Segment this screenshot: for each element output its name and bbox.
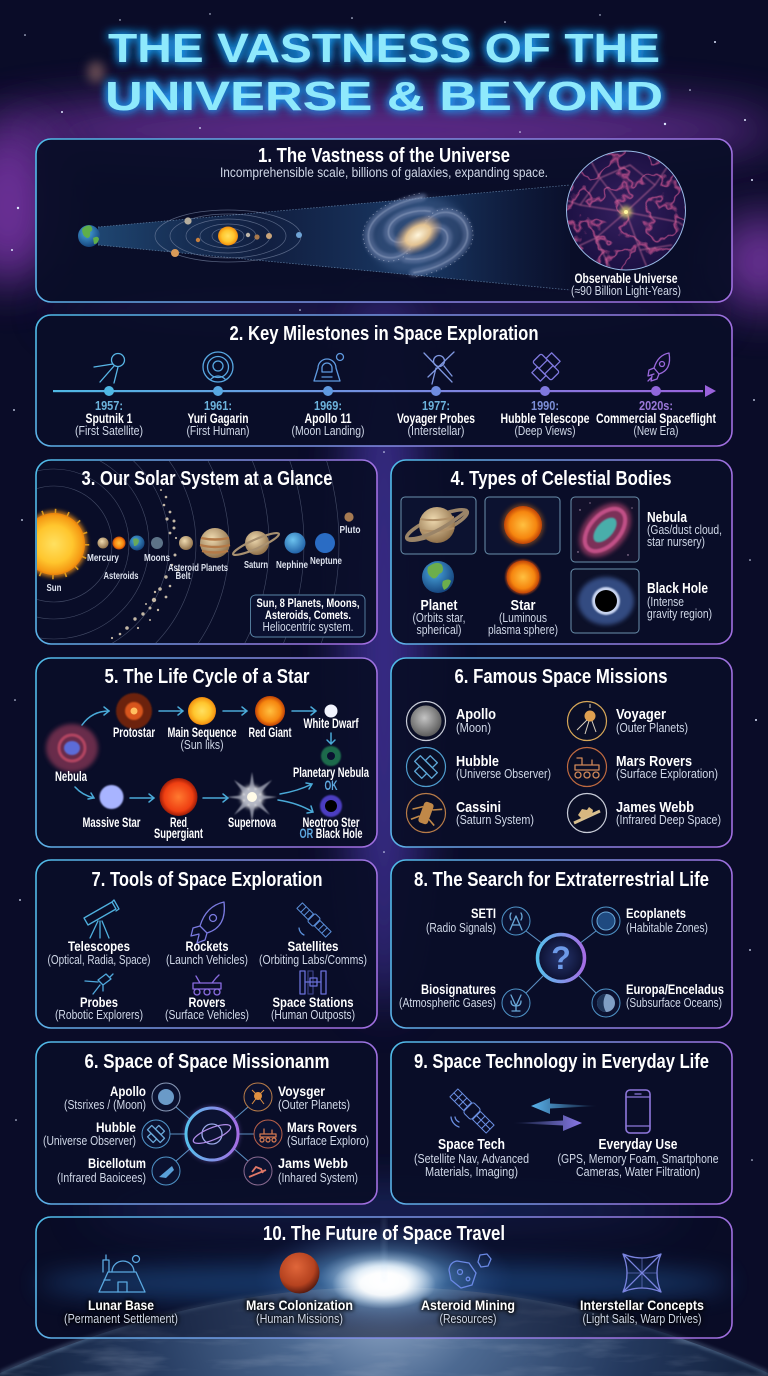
stage labels — [55, 716, 369, 841]
node: europa / enceladus: Europa/Enceladus — [626, 982, 724, 997]
milestone: voyager probes: (Interstellar) — [408, 424, 464, 438]
solar system labels: Neptune — [310, 556, 342, 567]
destination: interstellar concepts: (Light Sails, Warp Drives) — [582, 1312, 702, 1326]
milestone: apollo 11 — [292, 398, 364, 438]
node: seti — [426, 906, 530, 935]
label: nebula: Nebula — [647, 509, 688, 526]
icon: rocket — [648, 353, 670, 381]
tool: rovers: (Surface Vehicles) — [165, 1008, 249, 1022]
tool: rovers: Rovers — [188, 995, 226, 1010]
solar system labels: Asteroids — [104, 571, 139, 582]
milestone: hubble telescope — [500, 398, 590, 438]
icon: satellite — [449, 1088, 495, 1134]
icon: asteroids — [449, 1254, 491, 1288]
milestone: apollo 11: 1969: — [314, 398, 342, 413]
stage labels: OK — [324, 778, 338, 793]
label: black hole — [647, 580, 712, 621]
label: star — [488, 597, 558, 637]
mission: hubble: Hubble — [456, 753, 499, 770]
heading: section 2: 2. Key Milestones in Space Exploration — [230, 323, 538, 345]
node: apollo: (Stsrixes / (Moon) — [64, 1098, 146, 1112]
icon: sputnik — [94, 354, 124, 383]
icon: interstellar sail — [623, 1254, 661, 1292]
heading: section 4: 4. Types of Celestial Bodies — [450, 468, 672, 490]
solar system labels: Belt — [176, 571, 191, 582]
heading: section 10: 10. The Future of Space Travel — [263, 1223, 505, 1245]
label: star: Star — [510, 597, 536, 614]
solar system labels: Mercury — [87, 553, 119, 564]
stage arrows — [75, 707, 335, 813]
panel: life cycle of a star — [36, 658, 377, 847]
destination: lunar base — [64, 1298, 178, 1326]
mission: james webb: (Infrared Deep Space) — [616, 813, 721, 827]
heading: section 8: 8. The Search for Extraterrestrial Life — [414, 869, 709, 891]
mission: hubble: (Universe Observer) — [456, 767, 551, 781]
arrow: space tech to everyday use — [512, 1115, 582, 1131]
icon: earth — [78, 225, 100, 247]
node: hubble — [43, 1120, 170, 1148]
tool: telescopes: (Optical, Radia, Space) — [48, 953, 150, 967]
milestone: commercial spaceflight — [596, 398, 716, 438]
destination: asteroid mining: (Resources) — [440, 1312, 496, 1326]
image: star — [485, 497, 560, 554]
stage labels: Nebula — [55, 769, 87, 784]
solar system illustration — [37, 461, 354, 643]
label: observable universe — [571, 271, 681, 298]
milestone: sputnik 1 — [75, 398, 143, 438]
node: voyager — [244, 1083, 350, 1112]
stage labels: Main Sequence — [168, 725, 237, 740]
panel: famous space missions — [391, 658, 732, 847]
milestone: voyager probes: 1977: — [422, 398, 450, 413]
milestone: yuri gagarin — [186, 398, 250, 438]
milestone: apollo 11: (Moon Landing) — [292, 424, 364, 438]
panel: space of space missions — [36, 1042, 377, 1204]
image: nebula — [569, 493, 641, 567]
label: observable universe: (≈90 Billion Light-Years) — [571, 284, 681, 298]
milestone: hubble telescope: (Deep Views) — [514, 424, 576, 438]
timeline arrow — [53, 385, 716, 397]
milestone: sputnik 1: Sputnik 1 — [86, 411, 133, 426]
node: exoplanets: (Habitable Zones) — [626, 921, 708, 935]
destination: mars colonization — [246, 1298, 353, 1326]
connectors — [526, 931, 596, 993]
solar system labels: Nephine — [276, 560, 308, 571]
tool: space stations — [271, 971, 355, 1022]
spiral galaxy — [355, 180, 481, 290]
mission: apollo: Apollo — [456, 706, 496, 723]
mission: mars rovers — [568, 748, 718, 786]
node: mars rovers — [254, 1120, 369, 1148]
milestone: yuri gagarin: 1961: — [204, 398, 232, 413]
milestone: yuri gagarin: (First Human) — [186, 424, 250, 438]
milestone: apollo 11: Apollo 11 — [304, 411, 352, 426]
arrow: everyday use to space tech — [531, 1098, 598, 1114]
node: europa / enceladus — [592, 982, 724, 1017]
milestone: commercial spaceflight: (New Era) — [634, 424, 678, 438]
icon: hubble — [527, 348, 565, 386]
callout: solar system summary: Asteroids, Comets. — [265, 608, 351, 622]
panel: solar system — [35, 459, 378, 645]
node: apollo: Apollo — [110, 1084, 146, 1099]
stage labels: White Dwarf — [304, 716, 359, 731]
node: biosignatures: Biosignatures — [421, 982, 496, 997]
panel: search for extraterrestrial life — [391, 860, 732, 1028]
node: hubble: (Universe Observer) — [43, 1134, 136, 1148]
node: james webb: (Inhared System) — [278, 1171, 358, 1185]
callout: solar system summary: Heliocentric system. — [262, 620, 354, 634]
stage labels: Red — [170, 815, 187, 830]
central hub: planet — [184, 1106, 240, 1162]
node: james webb: Jams Webb — [278, 1156, 348, 1171]
label: planet: Planet — [420, 597, 458, 614]
solar system diagram — [155, 210, 302, 262]
tool: space stations: (Human Outposts) — [271, 1008, 355, 1022]
tool: rovers — [165, 975, 249, 1022]
destination: lunar base: Lunar Base — [88, 1298, 154, 1313]
solar system labels — [46, 525, 360, 594]
heading: section 7: 7. Tools of Space Exploration — [92, 869, 322, 891]
mission: cassini: Cassini — [456, 799, 501, 816]
heading: section 9: 9. Space Technology in Everyday Life — [414, 1051, 709, 1073]
label: planet: spherical) — [416, 623, 462, 637]
tool: probes: (Robotic Explorers) — [55, 1008, 143, 1022]
image: black hole — [571, 569, 639, 633]
stage labels: Supernova — [228, 815, 276, 830]
panel: space technology in everyday life — [391, 1042, 732, 1204]
tool: telescopes — [48, 900, 150, 967]
image: saturn — [401, 497, 476, 554]
destination: mars colonization: Mars Colonization — [246, 1298, 353, 1313]
node: bicellotum: (Infrared Baoicees) — [57, 1171, 146, 1185]
node: apollo — [64, 1083, 180, 1112]
mission: mars rovers: Mars Rovers — [616, 753, 692, 770]
icon: star — [505, 559, 541, 595]
label: black hole: Black Hole — [647, 580, 708, 597]
mission: cassini: (Saturn System) — [456, 813, 534, 827]
label: space tech — [414, 1136, 529, 1179]
label: star: plasma sphere) — [488, 623, 558, 637]
mission: apollo: (Moon) — [456, 721, 491, 735]
milestone: voyager probes: Voyager Probes — [397, 411, 475, 426]
node: bicellotum — [57, 1156, 180, 1185]
stellar bodies — [46, 693, 342, 822]
destination: interstellar concepts: Interstellar Concepts — [580, 1298, 704, 1313]
tool: telescopes: Telescopes — [68, 939, 130, 954]
milestone: sputnik 1: (First Satellite) — [75, 424, 143, 438]
panel: key milestones — [36, 315, 732, 446]
node: voyager: (Outer Planets) — [278, 1098, 350, 1112]
label: nebula: (Gas/dust cloud, — [647, 523, 722, 537]
label: black hole: (Intense — [647, 595, 684, 609]
label: nebula: star nursery) — [647, 535, 705, 549]
label: everyday use: Everyday Use — [598, 1136, 678, 1153]
node: biosignatures — [399, 982, 530, 1017]
question mark hub — [538, 934, 584, 982]
label: planet — [412, 597, 466, 637]
node: mars rovers: (Surface Exploro) — [287, 1134, 369, 1148]
node: mars rovers: Mars Rovers — [287, 1120, 357, 1135]
panel: tools of space exploration — [36, 860, 377, 1028]
label: nebula — [647, 509, 722, 549]
mission: cassini — [406, 794, 534, 832]
milestone: hubble telescope: 1990: — [531, 398, 559, 413]
solar system labels: Saturn — [244, 560, 268, 571]
label: everyday use — [558, 1136, 719, 1179]
tool: rockets — [166, 902, 248, 967]
solar system labels: Pluto — [340, 525, 360, 536]
stage labels: Supergiant — [154, 826, 203, 841]
mission: hubble — [406, 748, 551, 786]
stage labels: Planetary Nebula — [293, 765, 369, 780]
title: UNIVERSE & BEYOND — [105, 73, 663, 119]
icon: lunar base — [99, 1255, 145, 1292]
mission: voyager: Voyager — [616, 706, 666, 723]
tool: satellites: (Orbiting Labs/Comms) — [259, 953, 367, 967]
callout: solar system summary — [250, 595, 365, 637]
tool: rockets: Rockets — [186, 939, 228, 954]
mission: voyager: (Outer Planets) — [616, 721, 688, 735]
observable universe sphere — [566, 150, 690, 275]
tool: satellites — [259, 902, 367, 967]
destination: mars colonization: (Human Missions) — [256, 1312, 343, 1326]
node: europa / enceladus: (Subsurface Oceans) — [626, 996, 722, 1010]
destination: interstellar concepts — [580, 1298, 704, 1326]
label: black hole: gravity region) — [647, 607, 712, 621]
label: space tech: Materials, Imaging) — [425, 1165, 518, 1179]
heading: section 1: 1. The Vastness of the Universe — [258, 145, 510, 167]
node: voyager: Voysger — [278, 1084, 326, 1099]
title: THE VASTNESS OF THE — [108, 25, 660, 71]
node: james webb — [244, 1156, 358, 1185]
icon: voyager probe — [424, 352, 454, 384]
solar system labels: Moons — [144, 553, 170, 564]
heading: section 6: 6. Famous Space Missions — [454, 666, 668, 688]
tool: satellites: Satellites — [288, 939, 338, 954]
icon: mars — [280, 1252, 320, 1294]
node: biosignatures: (Atmospheric Gases) — [399, 996, 496, 1010]
tool: probes — [55, 974, 143, 1022]
icon: gagarin helmet — [203, 352, 233, 382]
subtitle: section 1: Incomprehensible scale, billions of galaxies, expanding space. — [220, 165, 548, 180]
node: exoplanets: Ecoplanets — [626, 906, 686, 921]
stage labels: Massive Star — [82, 815, 141, 830]
title — [105, 25, 663, 119]
callout: solar system summary: Sun, 8 Planets, Moons, — [256, 596, 360, 610]
tool: probes: Probes — [80, 995, 118, 1010]
mission: apollo — [406, 702, 496, 740]
mission: voyager — [568, 702, 688, 740]
node: seti: (Radio Signals) — [426, 921, 496, 935]
destination: asteroid mining: Asteroid Mining — [421, 1298, 515, 1313]
panel: future of space travel — [36, 1217, 732, 1338]
label: observable universe: Observable Universe — [574, 271, 678, 286]
connectors — [170, 1107, 254, 1161]
destination: asteroid mining — [421, 1298, 515, 1326]
label: planet: (Orbits star, — [412, 611, 466, 625]
milestone: hubble telescope: Hubble Telescope — [500, 411, 590, 426]
panel: celestial bodies — [391, 460, 732, 644]
milestone: commercial spaceflight: Commercial Spaceflight — [596, 411, 716, 426]
icon: planet earth — [422, 561, 454, 593]
sunrise glow — [254, 1218, 514, 1332]
node: bicellotum: Bicellotum — [88, 1156, 146, 1171]
milestone: voyager probes — [397, 398, 475, 438]
tool: rockets: (Launch Vehicles) — [166, 953, 248, 967]
milestone: yuri gagarin: Yuri Gagarin — [188, 411, 248, 426]
icon: lunar lander — [314, 354, 344, 381]
heading: section 3: 3. Our Solar System at a Glance — [82, 468, 332, 490]
mission: james webb — [568, 794, 721, 832]
milestone: commercial spaceflight: 2020s: — [639, 398, 673, 413]
solar system labels: Sun — [46, 583, 62, 594]
node: seti: SETI — [471, 906, 496, 921]
heading: repeated section 6: 6. Space of Space Missionanm — [84, 1051, 330, 1073]
scale beam — [98, 185, 570, 290]
stage labels: Protostar — [113, 725, 156, 740]
milestone: sputnik 1: 1957: — [95, 398, 123, 413]
stage labels: OR Black Hole — [300, 826, 363, 841]
label: everyday use: Cameras, Water Filtration) — [576, 1165, 700, 1179]
panel: the vastness of the universe — [36, 139, 732, 302]
label: space tech: (Setellite Nav, Advanced — [414, 1152, 529, 1166]
heading: section 5: 5. The Life Cycle of a Star — [104, 666, 310, 688]
label: everyday use: (GPS, Memory Foam, Smartphone — [558, 1152, 719, 1166]
mission: james webb: James Webb — [616, 799, 694, 816]
stage labels: Red Giant — [248, 725, 292, 740]
destination: lunar base: (Permanent Settlement) — [64, 1312, 178, 1326]
stage labels: Neotroo Ster — [302, 815, 360, 830]
solar system labels: Asteroid Planets — [168, 563, 228, 574]
label: star: (Luminous — [499, 611, 547, 625]
label: space tech: Space Tech — [438, 1136, 505, 1153]
mission: mars rovers: (Surface Exploration) — [616, 767, 718, 781]
tool: space stations: Space Stations — [272, 995, 354, 1010]
node: exoplanets — [592, 906, 708, 935]
icon: smartphone — [626, 1090, 650, 1133]
question mark hub: ? — [551, 940, 571, 976]
stage labels: (Sun liks) — [180, 738, 224, 752]
node: hubble: Hubble — [96, 1120, 136, 1135]
